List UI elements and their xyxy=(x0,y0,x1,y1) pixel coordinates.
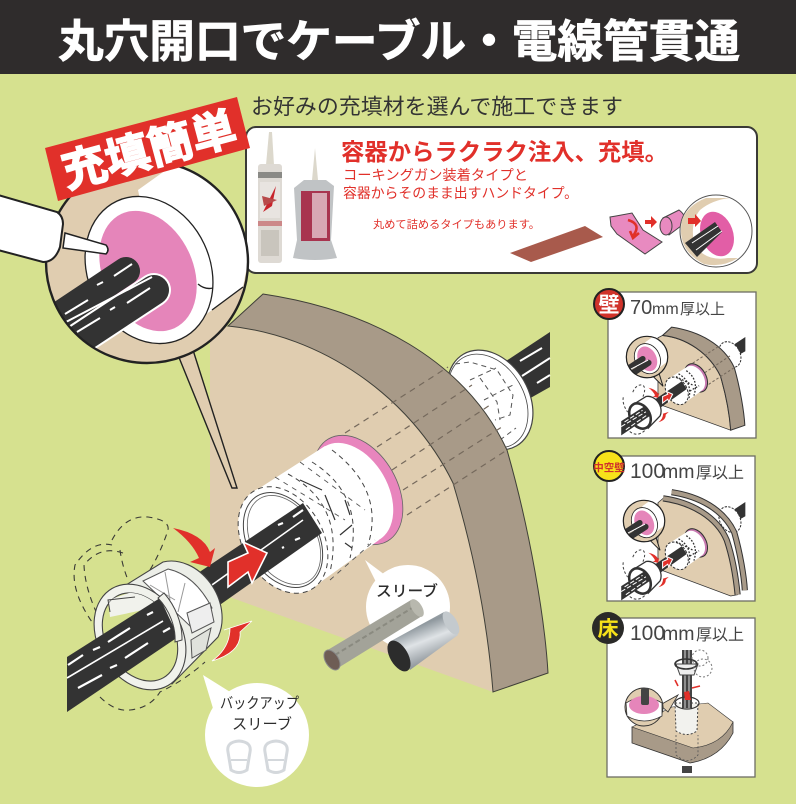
far-side cable xyxy=(500,332,550,405)
spec: 100mm: 100 xyxy=(630,460,665,483)
callout: backup sleeve xyxy=(203,675,309,787)
callout pointer xyxy=(178,350,237,488)
curved arrow upper xyxy=(173,528,215,567)
backup sleeve xyxy=(67,561,222,712)
hidden sleeve lines through wall xyxy=(345,367,507,515)
mini illustration: floor xyxy=(625,650,733,773)
icon: wide sleeve tube xyxy=(383,609,463,675)
icon: backup sleeves xyxy=(228,741,287,772)
title bar: 丸穴開口でケーブル・電線管貫通 xyxy=(58,16,740,67)
badge: wall xyxy=(594,289,624,319)
text: rolled type: 丸めて詰めるタイプもあります。 xyxy=(373,217,540,231)
badge: floor: 床 xyxy=(598,618,618,641)
callout: sleeve xyxy=(321,560,463,675)
badge: wall: 壁 xyxy=(598,294,620,317)
icon: pink roll xyxy=(660,210,685,235)
callout: sleeve: スリーブ xyxy=(376,582,438,600)
spec: 100mm: mm xyxy=(662,461,694,483)
callout: backup sleeve: バックアップ xyxy=(220,695,299,712)
label: easy filling: 充填簡単 xyxy=(57,104,242,198)
spec: 70mm: mm xyxy=(652,301,679,318)
wall xyxy=(210,294,548,692)
mini callout: wall xyxy=(626,336,670,386)
curved arrow lower xyxy=(212,621,252,661)
heading: easy injection: 容器からラクラク注入、充填。 xyxy=(341,139,668,165)
sleeve xyxy=(220,419,421,609)
backup sleeve dashed outline xyxy=(74,517,205,710)
panel: hollow wall 100mm xyxy=(593,451,755,601)
callout: filling detail xyxy=(45,160,260,365)
mini illustration: wall xyxy=(621,327,745,435)
icon: hand pouch xyxy=(293,148,337,260)
big red arrow xyxy=(228,542,267,587)
icon: small red arrow xyxy=(688,214,701,227)
icon: pink pouch xyxy=(610,213,662,254)
panel: floor 100mm xyxy=(592,612,755,777)
icon: thin sleeve tube xyxy=(321,597,427,673)
text: product types xyxy=(343,167,578,201)
mini illustration: hollow wall xyxy=(621,492,745,600)
title bar xyxy=(0,0,796,74)
badge: hollow wall: 中空壁 xyxy=(593,461,625,474)
spec: 100mm: 厚以上 xyxy=(696,464,744,482)
icon: caulking tube xyxy=(258,132,282,263)
icon: small red arrow xyxy=(645,216,657,228)
badge: floor xyxy=(592,612,624,644)
icon: filled hole xyxy=(680,195,752,267)
main cable xyxy=(150,503,322,640)
spec: 70mm: 70 xyxy=(630,297,652,319)
mini callout: hollow wall xyxy=(623,500,667,550)
subtitle: お好みの充填材を選んで施工できます xyxy=(251,95,623,119)
badge: hollow wall xyxy=(593,451,625,481)
icon: rolled filler mat xyxy=(510,226,603,262)
callout: backup sleeve: スリーブ xyxy=(232,715,292,733)
spec: 100mm: 100 xyxy=(630,622,665,645)
caulking gun xyxy=(0,195,108,262)
text: product types: 容器からそのまま出すハンドタイプ。 xyxy=(343,185,578,201)
spec: 70mm: 厚以上 xyxy=(680,301,725,318)
text: product types: コーキングガン装着タイプと xyxy=(343,167,528,183)
panel: wall 70mm xyxy=(594,289,756,438)
far-side sleeve xyxy=(430,335,550,465)
spec: 100mm: mm xyxy=(662,623,694,645)
spec: 100mm: 厚以上 xyxy=(696,626,744,644)
panel: filler products xyxy=(246,127,757,273)
